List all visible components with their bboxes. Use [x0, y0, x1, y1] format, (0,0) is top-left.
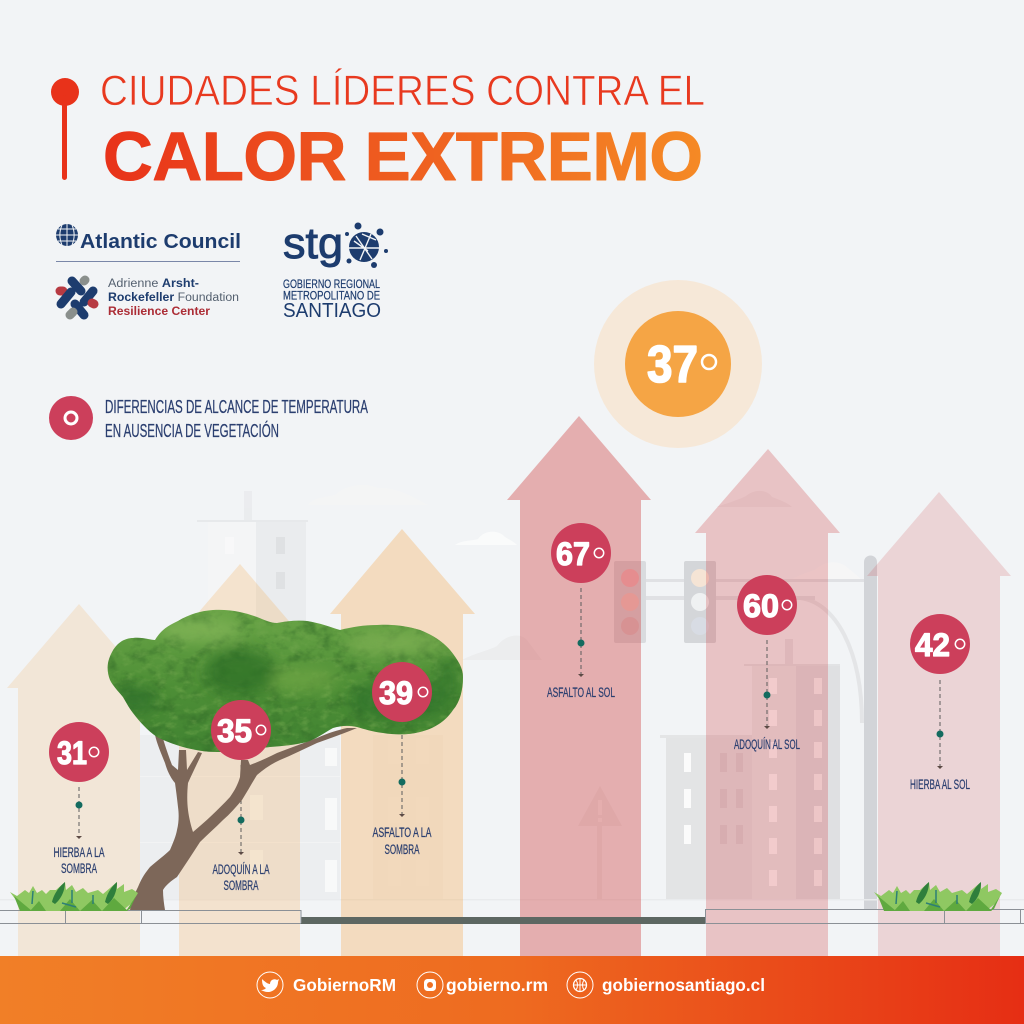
tree trunk and branches — [130, 728, 357, 910]
text: website: gobiernosantiago.cl — [602, 975, 765, 995]
label: hierba a la sombra: SOMBRA — [61, 861, 97, 876]
text: instagram handle: gobierno.rm — [446, 975, 548, 995]
logo: Resilience Center: Adrienne Arsht- — [108, 278, 199, 290]
faded city skyline — [0, 485, 1024, 910]
label: adoquin al sol: ADOQUÍN AL SOL — [734, 737, 800, 752]
marker: 31 — [49, 722, 109, 782]
grass left — [10, 882, 138, 911]
logo: Resilience Center: Resilience Center — [108, 306, 211, 318]
logo: Gobierno Regional Metropolitano de Santiago: METROPOLITANO DE — [283, 290, 380, 302]
icon: legend marker — [49, 396, 93, 440]
marker: 67: 67 — [556, 536, 590, 572]
buildings behind tree — [140, 735, 443, 900]
icon: globe — [56, 224, 78, 246]
traffic light — [614, 556, 877, 910]
building top left — [197, 491, 308, 652]
logo: Resilience Center: Rockefeller Foundation — [108, 292, 239, 304]
marker: 31: 31 — [57, 735, 87, 771]
logo: Resilience Center — [60, 278, 239, 318]
marker: 60 — [737, 575, 797, 635]
title — [51, 67, 705, 195]
title line 2: CALOR EXTREMO — [103, 118, 703, 195]
label: hierba al sol: HIERBA AL SOL — [910, 777, 970, 792]
label: asfalto a la sombra — [372, 735, 432, 857]
crown shading — [113, 618, 458, 720]
label: hierba al sol — [910, 680, 970, 792]
title line 1: CIUDADES LÍDERES CONTRA EL — [100, 67, 705, 115]
footer band — [0, 956, 1024, 1024]
logo: Gobierno Regional Metropolitano de Santiago: SANTIAGO — [283, 300, 381, 322]
arrow: hierba al sol — [867, 492, 1011, 956]
logo: Gobierno Regional Metropolitano de Santiago: stg — [283, 219, 343, 268]
marker: 35: 35 — [217, 713, 252, 749]
marker: 67 — [551, 523, 611, 583]
legend — [49, 396, 368, 441]
ground: sidewalks and road — [0, 910, 1024, 924]
icon: cross mark — [60, 280, 94, 315]
logo: Atlantic Council — [56, 224, 241, 262]
legend: EN AUSENCIA DE VEGETACIÓN — [105, 420, 279, 441]
marker: 35 — [211, 700, 271, 760]
marker: 42 — [910, 614, 970, 674]
building low right — [660, 735, 760, 899]
label: adoquin a la sombra — [212, 765, 270, 893]
label: hierba a la sombra: HIERBA A LA — [54, 845, 104, 860]
label: hierba a la sombra — [54, 787, 104, 876]
arrow: asfalto a la sombra — [330, 529, 475, 956]
logo: Gobierno Regional Metropolitano de Santiago — [283, 219, 388, 322]
grass right — [874, 882, 1002, 911]
arrow: adoquin a la sombra — [168, 564, 312, 956]
icon: star ball — [345, 222, 388, 268]
text: twitter handle: GobiernoRM — [293, 975, 396, 995]
clouds — [308, 485, 862, 660]
warning sign — [578, 786, 622, 899]
label: adoquin a la sombra: ADOQUÍN A LA — [212, 862, 270, 877]
logo: Atlantic Council: Atlantic Council — [80, 231, 241, 253]
label: adoquin al sol — [734, 640, 800, 752]
tree crown — [108, 610, 463, 752]
label: asfalto a la sombra: SOMBRA — [384, 842, 420, 857]
icon: pin — [51, 78, 79, 180]
icon: twitter — [257, 972, 283, 998]
marker: 60: 60 — [743, 588, 779, 624]
icon: web — [567, 972, 593, 998]
marker: 42: 42 — [915, 627, 950, 663]
label: asfalto a la sombra: ASFALTO A LA — [372, 825, 432, 840]
logo: Gobierno Regional Metropolitano de Santiago: GOBIERNO REGIONAL — [283, 279, 380, 291]
marker: 39 — [372, 662, 432, 722]
label: adoquin a la sombra: SOMBRA — [224, 878, 258, 893]
arrow: hierba a la sombra — [7, 604, 151, 956]
marker: 39: 39 — [379, 675, 413, 711]
arrow: adoquin al sol — [695, 449, 840, 956]
icon: instagram — [417, 972, 443, 998]
label: asfalto al sol: ASFALTO AL SOL — [547, 685, 615, 700]
arrow: asfalto al sol — [507, 416, 651, 956]
sun: 37 degrees — [594, 280, 762, 448]
sun: 37 degrees: 37 — [647, 336, 698, 394]
legend: DIFERENCIAS DE ALCANCE DE TEMPERATURA — [105, 397, 368, 417]
tree — [100, 600, 470, 910]
label: asfalto al sol — [547, 588, 615, 700]
tower right — [744, 639, 840, 899]
